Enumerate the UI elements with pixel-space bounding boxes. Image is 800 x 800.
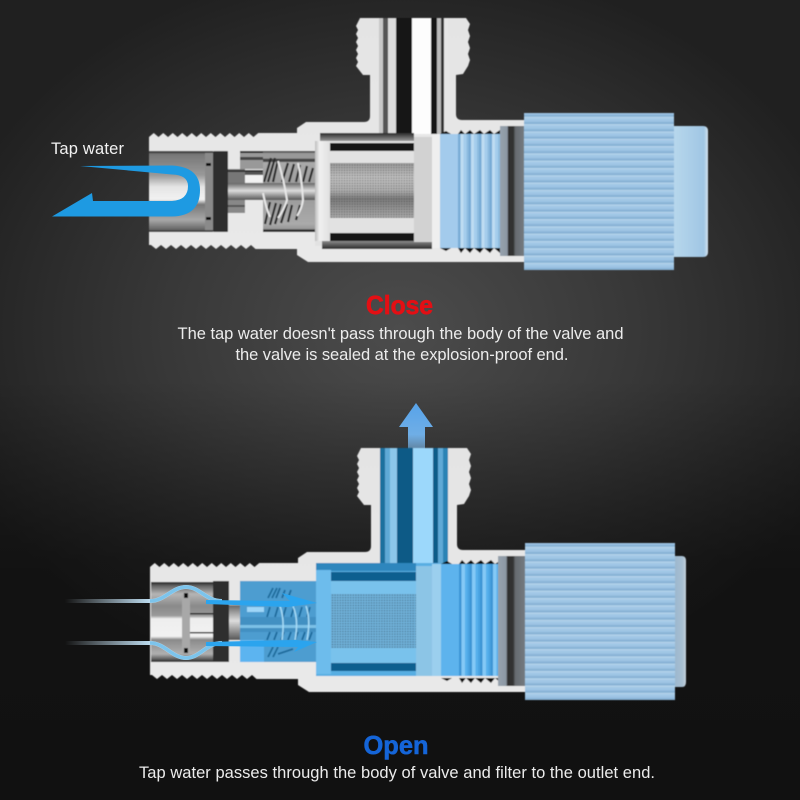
screw thread <box>441 556 508 686</box>
arrow: outlet flow <box>399 403 433 466</box>
heading: open: Open <box>364 730 428 760</box>
end sleeve <box>414 134 440 248</box>
text: close description: the valve is sealed at the explosion-proof end. <box>236 346 568 364</box>
text: open description: Tap water passes through the body of valve and filter to the outlet end. <box>139 764 655 782</box>
valve body cutaway <box>149 18 524 262</box>
outlet bore with water <box>380 448 448 568</box>
heading: close: Close <box>366 290 433 320</box>
filter cartridge in water <box>316 563 441 676</box>
valve body cutaway <box>150 448 525 692</box>
valve stem <box>228 183 316 200</box>
filter mesh <box>330 163 415 218</box>
text: close description: The tap water doesn't pass through the body of the valve and <box>178 325 624 343</box>
arrow: upper water stream <box>65 587 317 607</box>
text: close description <box>178 325 624 364</box>
label: tap water: Tap water <box>51 140 124 158</box>
end cap <box>675 556 686 687</box>
filter mesh <box>331 594 416 648</box>
arrow: water blocked and returning <box>52 166 200 216</box>
end cap <box>674 126 708 257</box>
valve: closed state <box>149 18 708 270</box>
rubber gasket <box>213 581 229 662</box>
valve stem <box>229 605 240 640</box>
spring <box>263 158 313 225</box>
spring chamber <box>228 151 315 232</box>
inlet bore <box>151 582 213 662</box>
spring <box>267 588 312 657</box>
valve disc <box>182 593 213 655</box>
outlet bore stripes <box>379 18 448 134</box>
screw thread <box>440 126 507 256</box>
ribbed knob <box>524 113 674 270</box>
rubber gasket <box>213 151 228 232</box>
valve seat detail <box>205 153 213 230</box>
valve: open state <box>150 448 686 700</box>
arrow: lower water stream <box>65 640 317 658</box>
ribbed knob <box>525 543 675 700</box>
end sleeve <box>416 564 441 676</box>
o-ring <box>498 556 525 686</box>
o-ring <box>500 126 524 256</box>
water-filled spring chamber <box>240 581 316 662</box>
inlet bore <box>149 151 213 232</box>
filter cartridge <box>315 133 432 249</box>
